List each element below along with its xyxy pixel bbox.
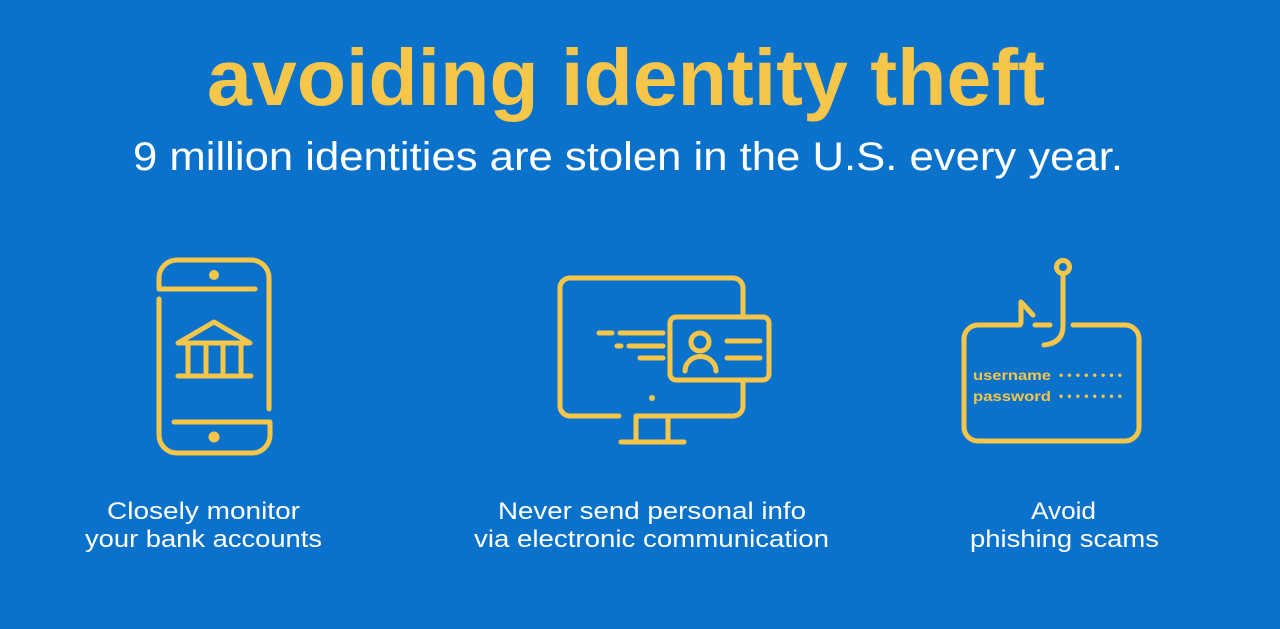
caption: bank accounts: your bank accounts bbox=[85, 526, 322, 553]
icon: phone with bank bbox=[159, 260, 270, 453]
title: avoiding identity theft bbox=[207, 33, 1045, 122]
icon: bank bbox=[178, 322, 251, 376]
login text: •••••••• bbox=[1059, 389, 1123, 403]
login text: password bbox=[973, 388, 1051, 404]
subtitle: 9 million identities are stolen in the U.S. every year. bbox=[133, 135, 1123, 179]
caption: phishing: phishing scams bbox=[970, 526, 1159, 553]
login text bbox=[973, 367, 1123, 404]
login text: username bbox=[973, 367, 1051, 383]
id card bbox=[670, 317, 769, 380]
caption: bank accounts: Closely monitor bbox=[107, 498, 300, 525]
caption: phishing: Avoid bbox=[1031, 498, 1096, 525]
icon: phishing hook with login card bbox=[964, 260, 1139, 441]
icon: monitor with id card bbox=[560, 278, 769, 442]
caption: bank accounts bbox=[85, 498, 322, 553]
caption: personal info: Never send personal info bbox=[498, 498, 806, 525]
login text: •••••••• bbox=[1059, 368, 1123, 382]
caption: personal info bbox=[474, 498, 829, 553]
caption: phishing bbox=[970, 498, 1159, 553]
caption: personal info: via electronic communication bbox=[474, 526, 829, 553]
